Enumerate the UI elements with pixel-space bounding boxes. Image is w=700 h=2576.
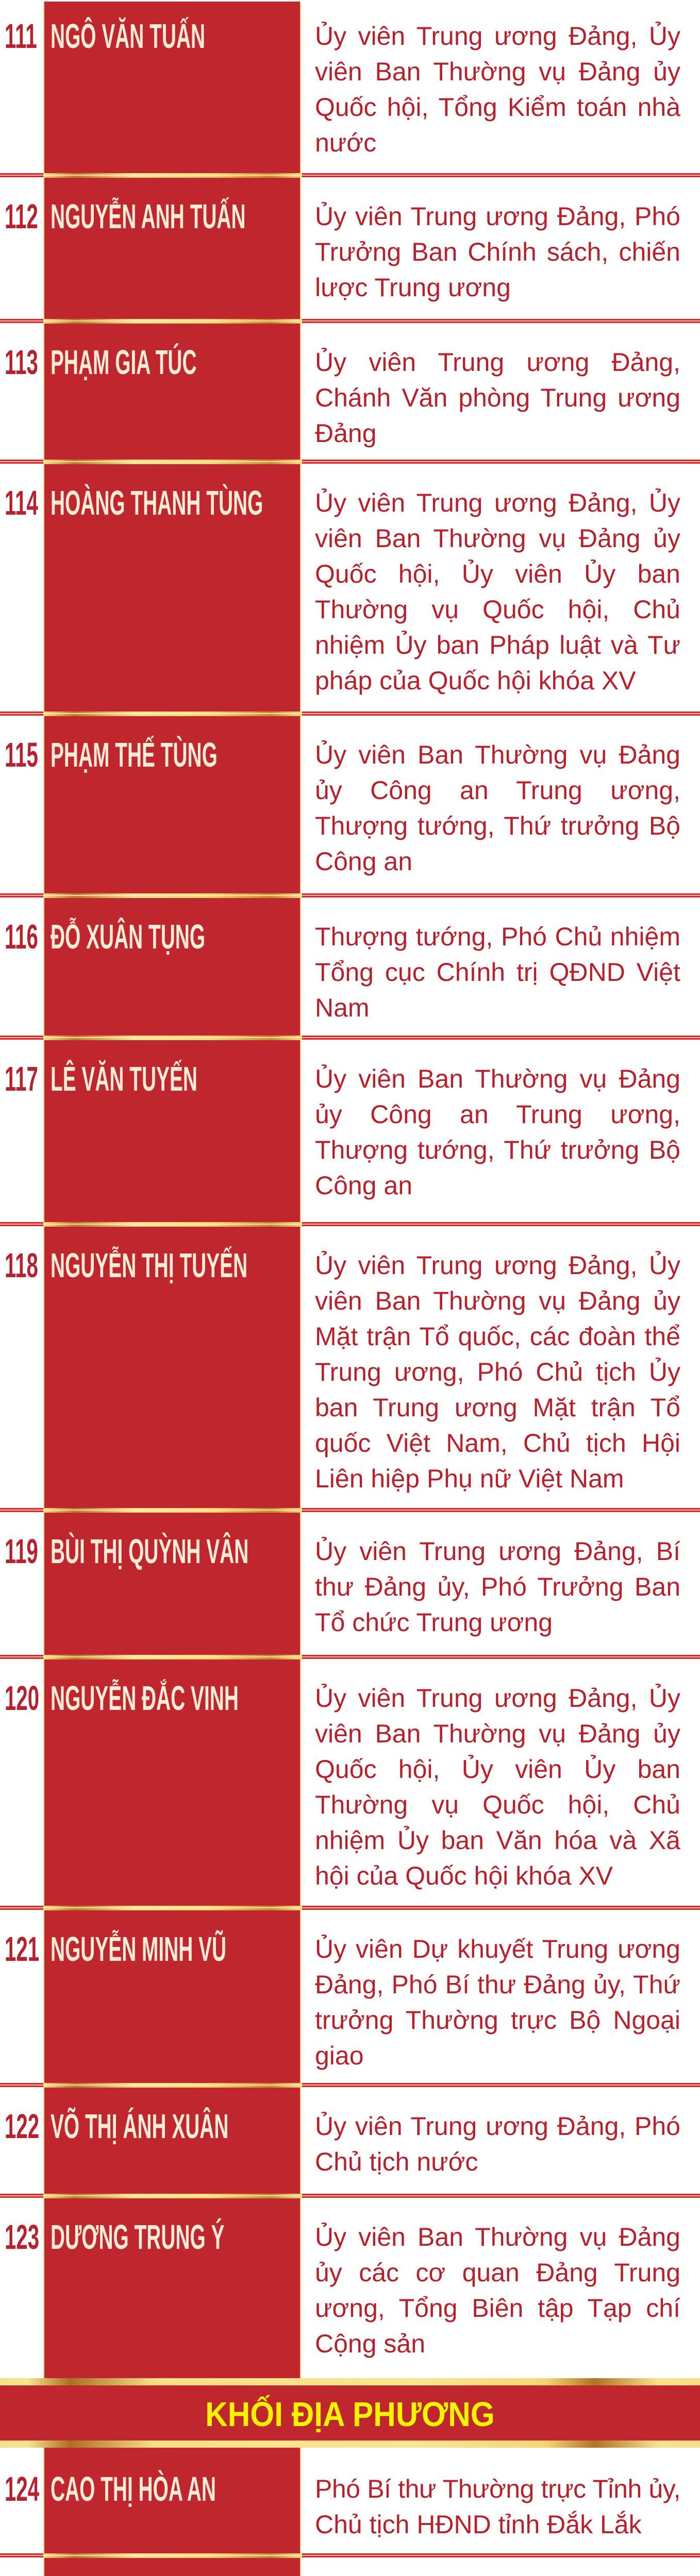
description 112 bbox=[315, 202, 680, 302]
number 118: 118 bbox=[5, 1246, 38, 1285]
description 114 bbox=[315, 488, 680, 695]
description 115: Thượng tướng, Thứ trưởng Bộ bbox=[315, 811, 680, 840]
description 124: Phó Bí thư Thường trực Tỉnh ủy, bbox=[315, 2475, 680, 2503]
description 120: viên Ban Thường vụ Đảng ủy bbox=[315, 1719, 680, 1748]
description 117: ủy Công an Trung ương, bbox=[315, 1100, 680, 1129]
description 112: Trưởng Ban Chính sách, chiến bbox=[315, 238, 680, 266]
name: Nguyễn Anh Tuấn: NGUYỄN ANH TUẤN bbox=[51, 197, 246, 236]
number 123: 123 bbox=[5, 2218, 39, 2257]
row 116 bbox=[5, 918, 680, 1022]
description 112: Ủy viên Trung ương Đảng, Phó bbox=[315, 202, 680, 231]
description 117 bbox=[315, 1064, 680, 1200]
row 119 bbox=[5, 1532, 680, 1637]
name: Ngô Văn Tuấn: NGÔ VĂN TUẤN bbox=[51, 17, 205, 56]
description 120: hội của Quốc hội khóa XV bbox=[315, 1861, 613, 1890]
number 115: 115 bbox=[5, 736, 38, 774]
red name column bbox=[43, 2, 301, 2576]
row 120 bbox=[5, 1679, 680, 1890]
description 117: Ủy viên Ban Thường vụ Đảng bbox=[315, 1064, 680, 1093]
description 120: Quốc hội, Ủy viên Ủy ban bbox=[315, 1755, 680, 1784]
name: Cao Thị Hòa An: CAO THỊ HÒA AN bbox=[51, 2470, 216, 2509]
name: Dương Trung Ý: DƯƠNG TRUNG Ý bbox=[51, 2218, 224, 2257]
name: Lê Văn Tuyến: LÊ VĂN TUYẾN bbox=[51, 1060, 197, 1098]
description 120: nhiệm Ủy ban Văn hóa và Xã bbox=[315, 1826, 680, 1855]
row 111 bbox=[5, 17, 680, 157]
description 122: Ủy viên Trung ương Đảng, Phó bbox=[315, 2112, 680, 2141]
row 118 bbox=[5, 1246, 680, 1493]
description 123: Ủy viên Ban Thường vụ Đảng bbox=[315, 2223, 680, 2251]
description 122 bbox=[315, 2112, 680, 2176]
description 122: Chủ tịch nước bbox=[315, 2147, 478, 2176]
description 116 bbox=[315, 922, 680, 1022]
number 114: 114 bbox=[5, 484, 38, 522]
description 115 bbox=[315, 740, 680, 876]
description 116: Tổng cục Chính trị QĐND Việt bbox=[315, 958, 680, 987]
description 116: Nam bbox=[315, 993, 370, 1022]
number 124: 124 bbox=[5, 2470, 39, 2509]
section header: Khối địa phương bbox=[0, 2378, 700, 2448]
row 115 bbox=[5, 736, 680, 876]
number 117: 117 bbox=[5, 1060, 38, 1098]
number 119: 119 bbox=[5, 1532, 38, 1571]
name: Bùi Thị Quỳnh Vân: BÙI THỊ QUỲNH VÂN bbox=[51, 1532, 248, 1571]
description 121: Đảng, Phó Bí thư Đảng ủy, Thứ bbox=[315, 1970, 680, 1999]
row 114 bbox=[5, 484, 680, 695]
row 117 bbox=[5, 1060, 680, 1200]
number 111: 111 bbox=[5, 17, 37, 56]
description 114: Thường vụ Quốc hội, Chủ bbox=[315, 595, 680, 624]
name: Hoàng Thanh Tùng: HOÀNG THANH TÙNG bbox=[51, 484, 263, 522]
description 123 bbox=[315, 2223, 680, 2358]
name: Võ Thị Ánh Xuân: VÕ THỊ ÁNH XUÂN bbox=[51, 2107, 228, 2146]
row 124 bbox=[5, 2470, 680, 2539]
description 111: Quốc hội, Tổng Kiểm toán nhà bbox=[315, 93, 680, 122]
description 114: nhiệm Ủy ban Pháp luật và Tư bbox=[315, 631, 680, 659]
description 118: Mặt trận Tổ quốc, các đoàn thể bbox=[315, 1322, 680, 1351]
number 121: 121 bbox=[5, 1930, 39, 1969]
description 121: Ủy viên Dự khuyết Trung ương bbox=[315, 1935, 680, 1963]
name: Nguyễn Minh Vũ: NGUYỄN MINH VŨ bbox=[51, 1930, 226, 1969]
description 118: Ủy viên Trung ương Đảng, Ủy bbox=[315, 1251, 680, 1280]
row 112 bbox=[5, 197, 680, 302]
description 117: Thượng tướng, Thứ trưởng Bộ bbox=[315, 1136, 680, 1164]
description 114: pháp của Quốc hội khóa XV bbox=[315, 666, 636, 695]
description 119: thư Đảng ủy, Phó Trưởng Ban bbox=[315, 1572, 680, 1601]
description 118: Liên hiệp Phụ nữ Việt Nam bbox=[315, 1464, 624, 1493]
number 122: 122 bbox=[5, 2107, 39, 2146]
description 120: Thường vụ Quốc hội, Chủ bbox=[315, 1790, 680, 1819]
description 114: Quốc hội, Ủy viên Ủy ban bbox=[315, 560, 680, 588]
description 118: ban Trung ương Mặt trận Tổ bbox=[315, 1393, 680, 1422]
description 118: quốc Việt Nam, Chủ tịch Hội bbox=[315, 1429, 680, 1458]
row 123 bbox=[5, 2218, 680, 2358]
description 119: Tổ chức Trung ương bbox=[315, 1608, 553, 1637]
description 111: viên Ban Thường vụ Đảng ủy bbox=[315, 57, 680, 86]
row 125 bbox=[0, 2555, 700, 2576]
row 113 bbox=[5, 343, 680, 448]
number 120: 120 bbox=[5, 1679, 39, 1718]
description 118: viên Ban Thường vụ Đảng ủy bbox=[315, 1286, 680, 1315]
description 121: trưởng Thường trực Bộ Ngoại bbox=[315, 2006, 680, 2035]
description 124 bbox=[315, 2475, 680, 2539]
description 114: Ủy viên Trung ương Đảng, Ủy bbox=[315, 488, 680, 517]
description 118 bbox=[315, 1251, 680, 1493]
row 122 bbox=[5, 2107, 680, 2176]
number 112: 112 bbox=[5, 197, 38, 236]
number 116: 116 bbox=[5, 918, 38, 956]
description 123: ương, Tổng Biên tập Tạp chí bbox=[315, 2294, 680, 2323]
name: Nguyễn Đắc Vinh: NGUYỄN ĐẮC VINH bbox=[51, 1679, 239, 1718]
description 115: Công an bbox=[315, 847, 412, 876]
description 120 bbox=[315, 1684, 680, 1890]
name: Nguyễn Thị Tuyến: NGUYỄN THỊ TUYẾN bbox=[51, 1246, 247, 1285]
description 111: nước bbox=[315, 128, 376, 157]
description 112: lược Trung ương bbox=[315, 273, 511, 302]
description 113: Chánh Văn phòng Trung ương bbox=[315, 383, 680, 412]
description 115: ủy Công an Trung ương, bbox=[315, 776, 680, 805]
description 115: Ủy viên Ban Thường vụ Đảng bbox=[315, 740, 680, 769]
description 121: giao bbox=[315, 2041, 364, 2070]
description 113 bbox=[315, 348, 680, 448]
description 119 bbox=[315, 1537, 680, 1637]
name: Phạm Thế Tùng: PHẠM THẾ TÙNG bbox=[51, 736, 218, 774]
description 111: Ủy viên Trung ương Đảng, Ủy bbox=[315, 22, 680, 50]
header text: KHỐI ĐỊA PHƯƠNG bbox=[205, 2395, 495, 2434]
description 111 bbox=[315, 22, 680, 157]
description 124: Chủ tịch HĐND tỉnh Đắk Lắk bbox=[315, 2510, 642, 2539]
description 114: viên Ban Thường vụ Đảng ủy bbox=[315, 524, 680, 553]
name: Đỗ Xuân Tụng: ĐỖ XUÂN TỤNG bbox=[51, 918, 205, 956]
description 119: Ủy viên Trung ương Đảng, Bí bbox=[315, 1537, 680, 1566]
description 113: Ủy viên Trung ương Đảng, bbox=[315, 348, 680, 377]
description 117: Công an bbox=[315, 1171, 412, 1200]
number 113: 113 bbox=[5, 343, 38, 382]
name: Phạm Gia Túc: PHẠM GIA TÚC bbox=[51, 343, 197, 382]
description 123: Cộng sản bbox=[315, 2329, 425, 2358]
description 123: ủy các cơ quan Đảng Trung bbox=[315, 2258, 680, 2287]
description 120: Ủy viên Trung ương Đảng, Ủy bbox=[315, 1684, 680, 1713]
row 121 bbox=[5, 1930, 680, 2070]
description 116: Thượng tướng, Phó Chủ nhiệm bbox=[315, 922, 680, 951]
description 118: Trung ương, Phó Chủ tịch Ủy bbox=[315, 1358, 680, 1386]
description 113: Đảng bbox=[315, 419, 377, 448]
description 121 bbox=[315, 1935, 680, 2070]
